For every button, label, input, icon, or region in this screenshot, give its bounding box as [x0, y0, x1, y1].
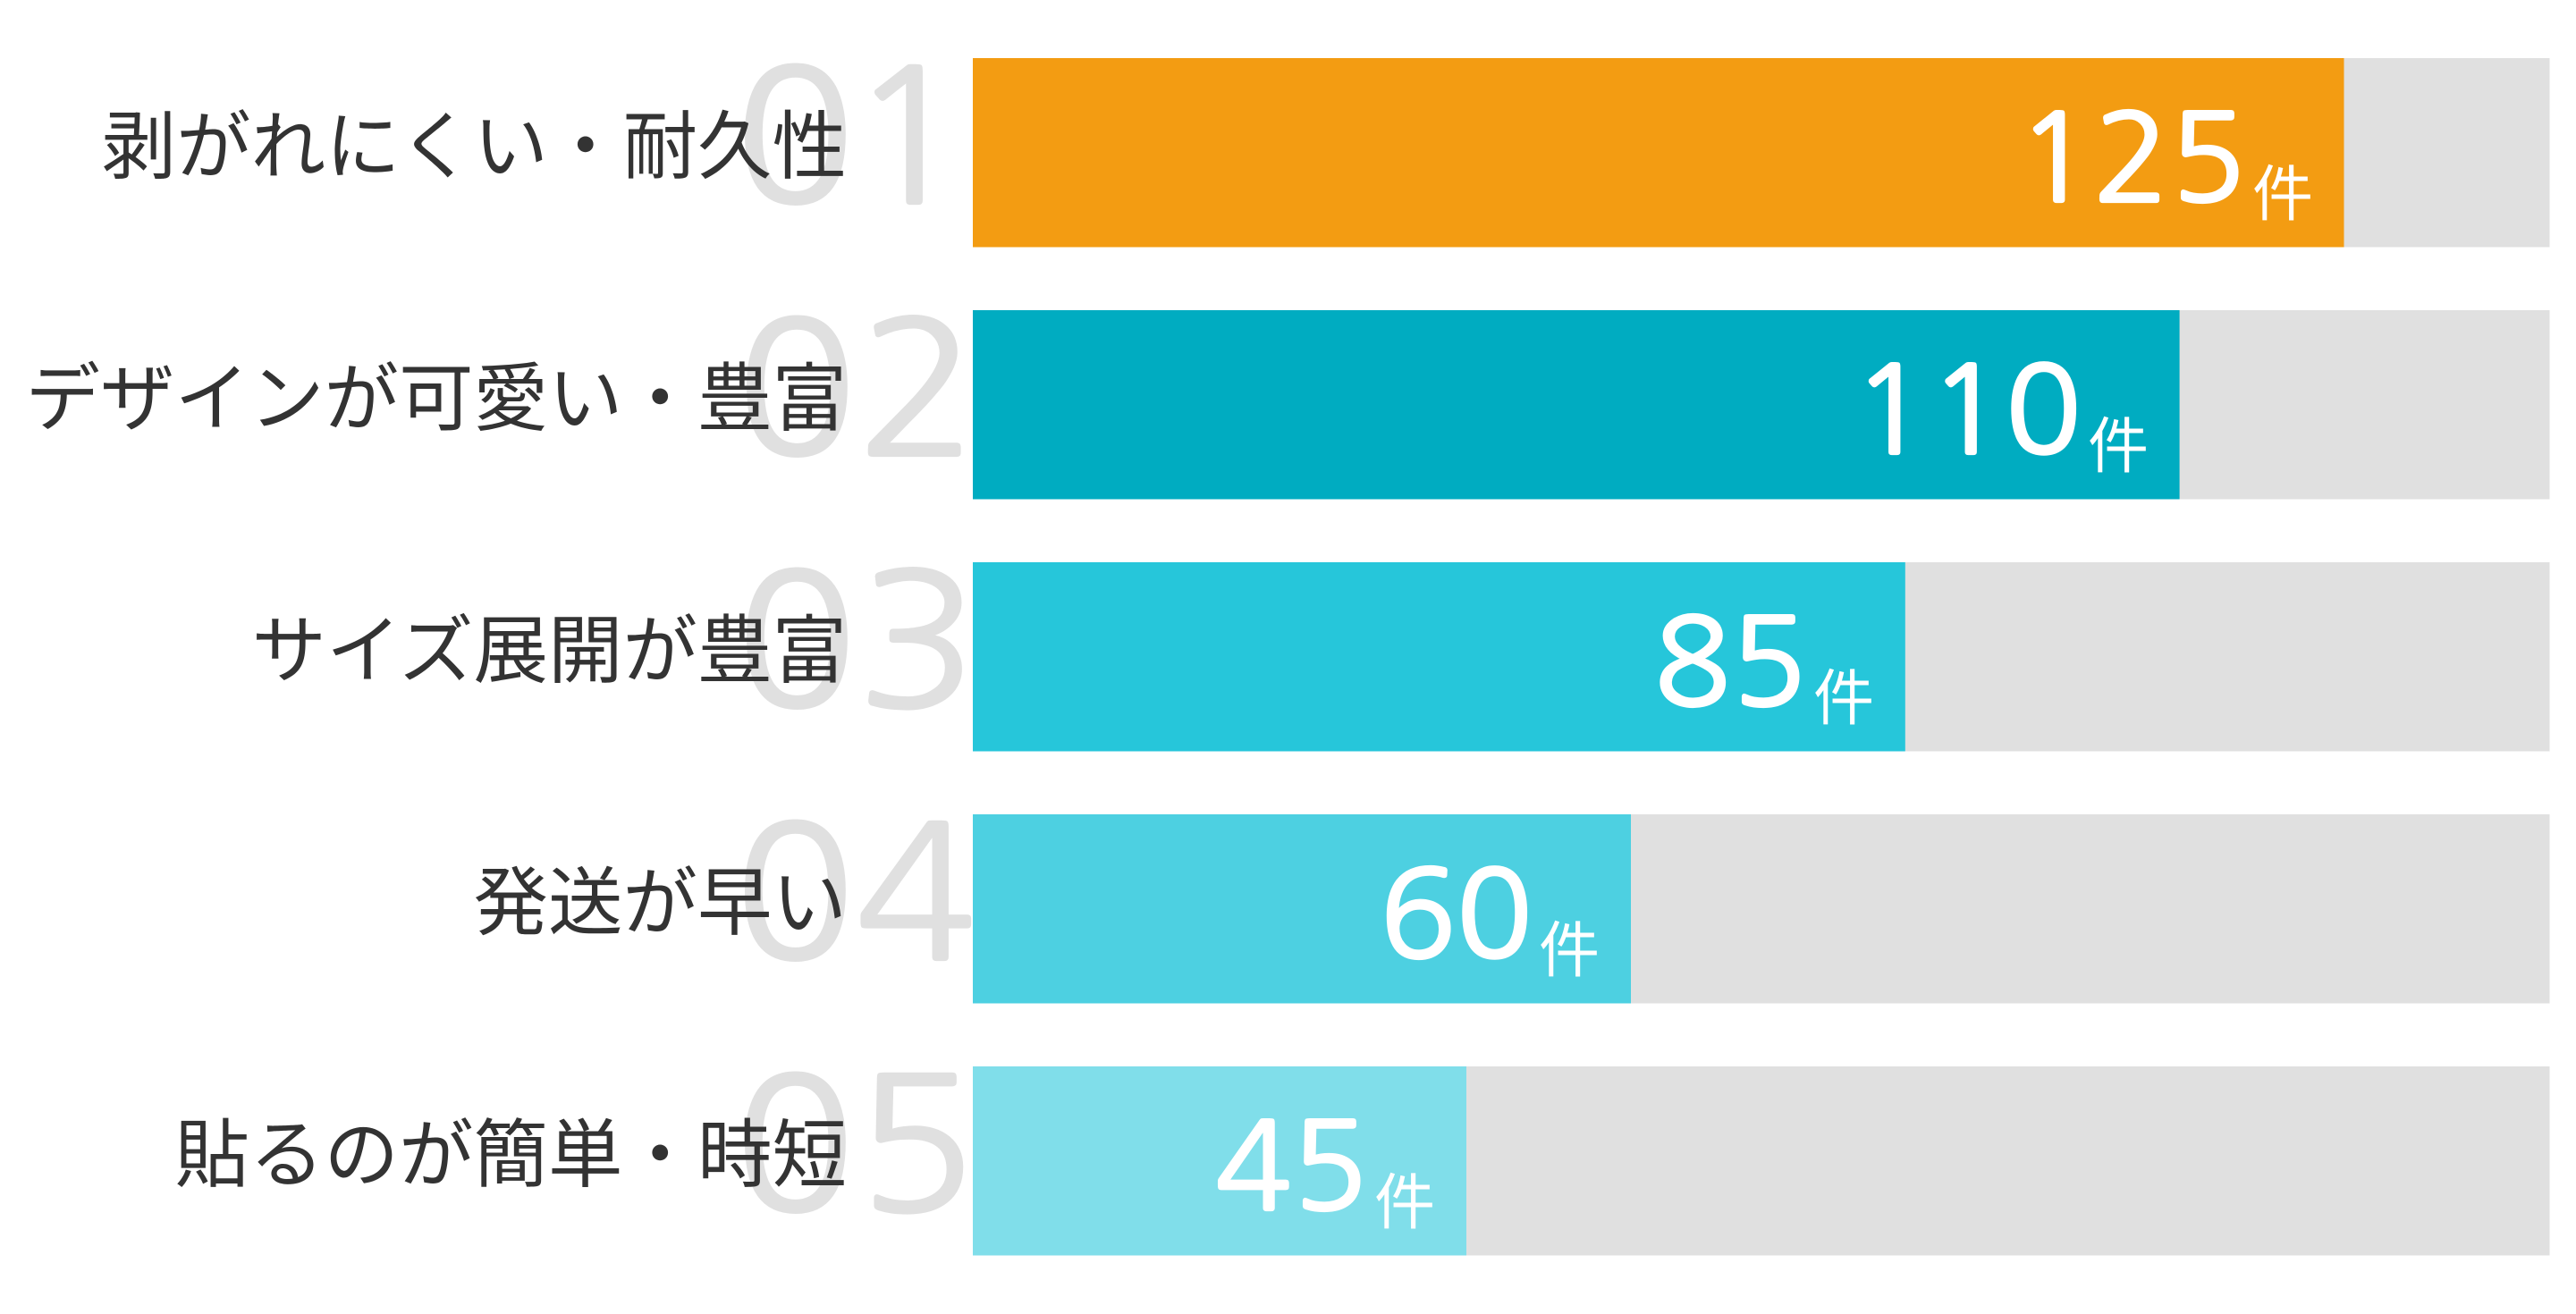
row 3: サイズ展開が豊富	[252, 550, 2550, 751]
value 110件: 件	[2088, 413, 2149, 481]
row 5: 貼るのが簡単・時短	[175, 1054, 2550, 1255]
bar value 60	[973, 814, 1631, 1003]
rank number 05: 05	[734, 1054, 976, 1239]
rank number 03: 03	[736, 550, 978, 735]
bar track 2	[973, 310, 2550, 499]
label 5: 貼るのが簡単・時短	[175, 1113, 847, 1197]
value 85件	[1654, 602, 1874, 733]
bar track 1	[973, 58, 2550, 247]
bar value 85	[973, 562, 1905, 751]
bar value 45	[973, 1066, 1466, 1255]
row 2: デザインが可愛い・豊富	[25, 298, 2550, 499]
value 45件: 45	[1215, 1107, 1368, 1227]
value 60件: 件	[1539, 917, 1600, 985]
rank number 01: 01	[734, 46, 968, 231]
value 45件	[1215, 1107, 1435, 1237]
label 4: 発送が早い	[474, 861, 847, 945]
row 4: 発送が早い	[474, 802, 2550, 1003]
label 2: デザインが可愛い・豊富	[25, 357, 847, 441]
label 3: サイズ展開が豊富	[252, 609, 847, 693]
bar value 125	[973, 58, 2344, 247]
value 60件	[1380, 855, 1600, 985]
bar track 3	[973, 562, 2550, 751]
bar value 110	[973, 310, 2180, 499]
value 110件: 110	[1853, 350, 2082, 471]
value 45件: 件	[1374, 1169, 1435, 1237]
value 125件: 件	[2252, 161, 2313, 229]
value 85件: 85	[1654, 602, 1807, 723]
rank number 04: 04	[734, 802, 976, 987]
value 60件: 60	[1380, 855, 1533, 975]
bar track 5	[973, 1066, 2550, 1255]
label 1: 剥がれにくい・耐久性	[102, 105, 847, 189]
bar track 4	[973, 814, 2550, 1003]
rank number 02: 02	[736, 298, 978, 483]
row 1: 剥がれにくい・耐久性	[102, 46, 2550, 247]
value 85件: 件	[1813, 665, 1874, 733]
value 125件: 125	[2017, 98, 2246, 219]
